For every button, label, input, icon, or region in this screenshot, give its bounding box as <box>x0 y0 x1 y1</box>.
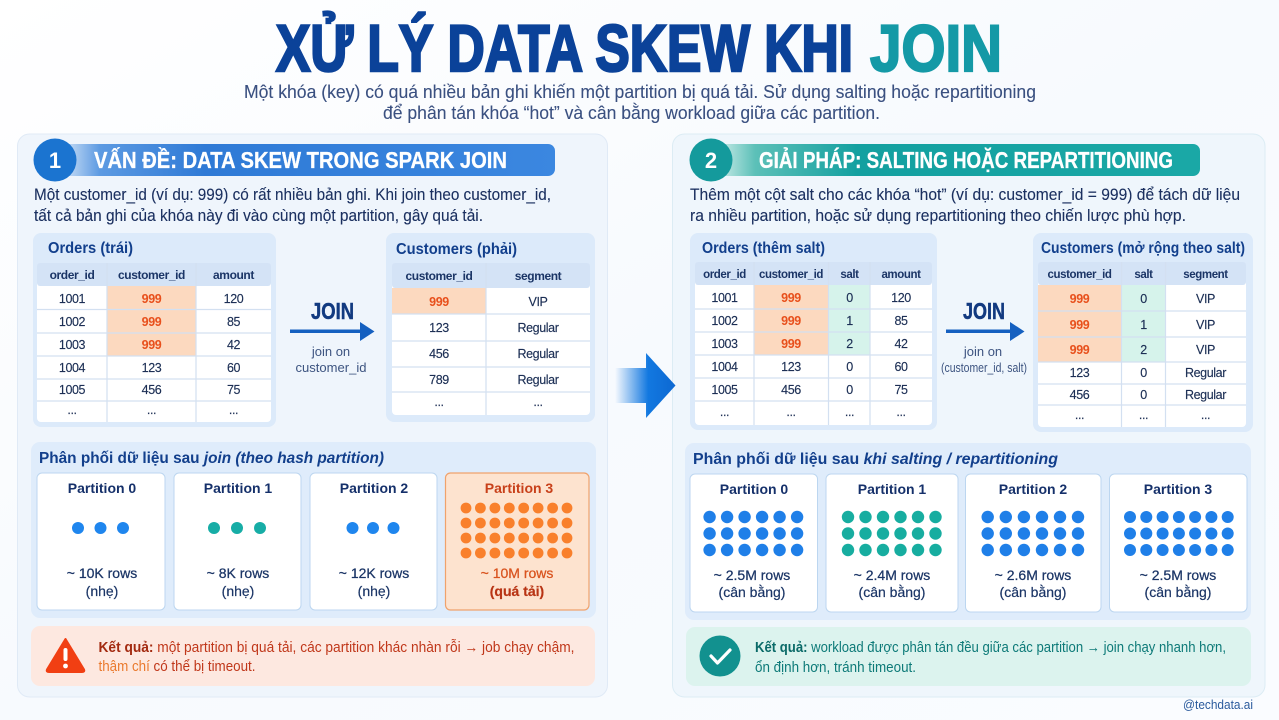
table: customers expanded by salt: VIP <box>1196 292 1215 306</box>
table: orders left: 1001 <box>59 292 86 306</box>
table: orders left: 42 <box>227 338 240 352</box>
table: customers left: Regular <box>518 321 559 335</box>
table: orders with salt: order_id <box>703 269 746 281</box>
arrow: problem to solution <box>615 353 676 418</box>
card: balanced partition 2: Partition 2 <box>999 481 1067 497</box>
table: orders left: ... <box>67 403 77 417</box>
table: customers expanded by salt: 123 <box>1070 366 1090 380</box>
arrow: join left <box>290 298 374 375</box>
table: customers expanded by salt: Regular <box>1185 388 1226 402</box>
table: customers expanded by salt: ... <box>1075 408 1084 422</box>
table: orders left: 85 <box>227 315 240 329</box>
arrow: join right <box>941 298 1027 375</box>
table: customers left: Regular <box>518 373 559 387</box>
table: orders with salt: 0 <box>846 360 853 374</box>
table: customers left: 789 <box>429 373 449 387</box>
table: orders with salt: 999 <box>781 314 801 328</box>
table: orders left <box>33 233 276 427</box>
card: partition 1 <box>174 473 301 610</box>
table: orders left: 999 <box>142 338 162 352</box>
card: balanced partition 2: (cân bằng) <box>1000 584 1066 600</box>
table: customers left: ... <box>434 395 444 409</box>
callout: problem result: Kết quả: một partition bị quá tải, các partition khác nhàn rỗi → job chạy chậm, <box>98 639 574 656</box>
table: customers expanded by salt: salt <box>1134 269 1153 281</box>
table: customers expanded by salt: ... <box>1201 408 1210 422</box>
table: orders with salt: ... <box>845 405 854 419</box>
table: orders with salt: ... <box>720 405 729 419</box>
table: customers expanded by salt: 999 <box>1070 343 1090 357</box>
table: orders with salt: 999 <box>781 337 801 351</box>
panel: distribution after join <box>31 442 596 618</box>
card: balanced partition 1: (cân bằng) <box>859 584 925 600</box>
text: solution description <box>690 186 1240 225</box>
subtitle <box>244 82 1036 123</box>
card: balanced partition 1 <box>826 474 958 612</box>
arrow: join left: JOIN <box>311 298 354 324</box>
callout: problem result <box>31 626 595 686</box>
icon: check circle <box>700 636 740 676</box>
card: partition 2: ~ 12K rows <box>339 565 409 581</box>
table: orders left: 75 <box>227 383 240 397</box>
card: partition 0: Partition 0 <box>68 480 136 496</box>
callout: solution result: ổn định hơn, tránh timeout. <box>755 659 916 676</box>
arrow: join right: (customer_id, salt) <box>941 360 1027 375</box>
table: orders left: 120 <box>224 292 244 306</box>
title: JOIN <box>870 11 1002 85</box>
table: orders left: amount <box>213 268 254 282</box>
panel: distribution after join: Phân phối dữ liệu sau join (theo hash partition) <box>39 450 384 467</box>
card: balanced partition 3 <box>1110 474 1247 612</box>
table: orders with salt: 0 <box>846 383 853 397</box>
table: orders left: 60 <box>227 361 240 375</box>
card: balanced partition 1: Partition 1 <box>858 481 926 497</box>
callout: solution result <box>686 627 1251 686</box>
subtitle: Một khóa (key) có quá nhiều bản ghi khiến một partition bị quá tải. Sử dụng salting hoặc repartitioning <box>244 82 1036 102</box>
table: customers expanded by salt: 456 <box>1070 388 1090 402</box>
heading: problem banner <box>34 138 555 182</box>
table: customers left <box>386 233 595 422</box>
table: orders left: 1004 <box>59 361 86 375</box>
table: orders with salt: 75 <box>894 383 908 397</box>
table: customers expanded by salt: VIP <box>1196 318 1215 332</box>
table: orders left: ... <box>147 403 156 417</box>
table: customers left: 456 <box>429 347 449 361</box>
table: customers expanded by salt: 0 <box>1140 366 1147 380</box>
text: problem description <box>34 186 551 225</box>
card: partition 3 overloaded: (quá tải) <box>490 583 544 599</box>
table: orders with salt: 1002 <box>711 314 738 328</box>
card: partition 3 overloaded: ~ 10M rows <box>481 565 553 581</box>
card: balanced partition 2: ~ 2.6M rows <box>995 567 1071 583</box>
card: partition 1: Partition 1 <box>204 480 272 496</box>
table: orders with salt <box>690 233 937 430</box>
table: customers expanded by salt: segment <box>1183 269 1228 281</box>
panel: distribution after salting: Phân phối dữ liệu sau khi salting / repartitioning <box>693 451 1058 468</box>
table: orders left: customer_id <box>118 268 185 282</box>
arrow: join left: join on <box>311 344 350 359</box>
table: customers expanded by salt: ... <box>1139 408 1148 422</box>
table: customers left: Regular <box>518 347 559 361</box>
table: orders left: 1002 <box>59 315 86 329</box>
table: orders with salt: 1005 <box>711 383 738 397</box>
table: orders left: 1003 <box>59 338 86 352</box>
table: orders with salt: 2 <box>846 337 853 351</box>
table: customers expanded by salt: 999 <box>1070 292 1090 306</box>
table: orders with salt: ... <box>786 405 796 419</box>
heading: solution banner: 2 <box>705 148 717 173</box>
table: customers left: ... <box>533 395 543 409</box>
panel: problem <box>18 134 608 697</box>
card: balanced partition 2 <box>966 474 1101 612</box>
card: partition 0: ~ 10K rows <box>67 565 137 581</box>
table: orders with salt: Orders (thêm salt) <box>702 240 825 257</box>
heading: solution banner: GIẢI PHÁP: SALTING HOẶC REPARTITIONING <box>759 145 1173 173</box>
table: customers left: customer_id <box>406 269 473 283</box>
card: balanced partition 0: Partition 0 <box>720 481 788 497</box>
table: customers expanded by salt: 0 <box>1140 388 1147 402</box>
table: orders left: 1005 <box>59 383 86 397</box>
table: orders with salt: 0 <box>846 291 853 305</box>
table: orders with salt: 60 <box>894 360 908 374</box>
callout: solution result: Kết quả: workload được phân tán đều giữa các partition → join chạy nhanh hơn, <box>755 639 1226 656</box>
icon: warning triangle <box>47 639 84 672</box>
card: partition 2 <box>310 473 437 610</box>
arrow: join left: customer_id <box>296 360 366 375</box>
table: orders with salt: salt <box>840 269 859 281</box>
arrow: join right: join on <box>963 344 1002 359</box>
table: customers expanded by salt: 0 <box>1140 292 1147 306</box>
table: orders with salt: 85 <box>894 314 908 328</box>
table: orders with salt: 1001 <box>711 291 738 305</box>
text: solution description: Thêm một cột salt cho các khóa “hot” (ví dụ: customer_id = 999) để tách dữ liệu <box>690 186 1240 204</box>
arrow: join right: JOIN <box>963 298 1005 324</box>
table: orders left: 123 <box>142 361 162 375</box>
table: customers expanded by salt: 2 <box>1140 343 1147 357</box>
table: orders left: order_id <box>50 268 94 282</box>
table: customers expanded by salt: Regular <box>1185 366 1226 380</box>
panel: solution <box>672 134 1265 697</box>
table: orders left: Orders (trái) <box>48 240 133 257</box>
card: balanced partition 3: Partition 3 <box>1144 481 1212 497</box>
card: balanced partition 0 <box>690 474 818 612</box>
table: orders with salt: 123 <box>781 360 801 374</box>
table: customers expanded by salt: 999 <box>1070 318 1090 332</box>
table: orders left: 456 <box>142 383 162 397</box>
callout: problem result: thậm chí có thể bị timeout. <box>98 658 256 675</box>
card: partition 2: Partition 2 <box>340 480 408 496</box>
table: orders left: 999 <box>142 315 162 329</box>
table: customers expanded by salt: Customers (mở rộng theo salt) <box>1041 240 1245 257</box>
card: balanced partition 3: (cân bằng) <box>1145 584 1211 600</box>
table: orders left: ... <box>229 403 238 417</box>
card: partition 3 overloaded <box>446 473 589 610</box>
card: balanced partition 1: ~ 2.4M rows <box>854 567 930 583</box>
table: orders with salt: 42 <box>894 337 908 351</box>
table: orders with salt: 456 <box>781 383 801 397</box>
text: problem description: tất cả bản ghi của khóa này đi vào cùng một partition, gây quá tải. <box>34 207 483 225</box>
table: customers left: 999 <box>429 295 449 309</box>
card: partition 1: ~ 8K rows <box>207 565 269 581</box>
text: solution description: ra nhiều partition, hoặc sử dụng repartitioning theo chiến lược phù hợp. <box>690 207 1186 225</box>
table: orders with salt: amount <box>881 269 921 281</box>
text: problem description: Một customer_id (ví dụ: 999) có rất nhiều bản ghi. Khi join theo customer_id, <box>34 186 551 204</box>
table: orders with salt: 1003 <box>711 337 738 351</box>
card: partition 1: (nhẹ) <box>222 583 254 599</box>
card: balanced partition 0: (cân bằng) <box>719 584 785 600</box>
heading: problem banner: 1 <box>49 148 61 173</box>
heading: problem banner: VẤN ĐỀ: DATA SKEW TRONG SPARK JOIN <box>94 146 507 173</box>
credit: @techdata.ai <box>1183 697 1253 712</box>
card: partition 0 <box>37 473 165 610</box>
card: partition 3 overloaded: Partition 3 <box>485 480 553 496</box>
card: partition 2: (nhẹ) <box>358 583 390 599</box>
table: customers expanded by salt: VIP <box>1196 343 1215 357</box>
card: balanced partition 0: ~ 2.5M rows <box>714 567 790 583</box>
table: customers left: Customers (phải) <box>396 241 517 258</box>
title: XỬ LÝ DATA SKEW KHI <box>276 11 853 85</box>
panel: distribution after salting <box>685 443 1251 620</box>
table: orders left: 999 <box>142 292 162 306</box>
table: customers expanded by salt: customer_id <box>1048 269 1112 281</box>
table: orders with salt: ... <box>896 405 906 419</box>
table: customers expanded by salt <box>1033 233 1253 432</box>
table: orders with salt: 120 <box>891 291 911 305</box>
table: customers left: 123 <box>429 321 449 335</box>
table: customers left: VIP <box>529 295 548 309</box>
table: customers expanded by salt: 1 <box>1140 318 1147 332</box>
table: orders with salt: customer_id <box>759 269 823 281</box>
table: orders with salt: 1004 <box>711 360 738 374</box>
card: balanced partition 3: ~ 2.5M rows <box>1140 567 1216 583</box>
heading: solution banner <box>690 138 1200 182</box>
subtitle: để phân tán khóa “hot” và cân bằng workload giữa các partition. <box>383 102 880 123</box>
table: orders with salt: 999 <box>781 291 801 305</box>
table: customers left: segment <box>515 269 562 283</box>
table: orders with salt: 1 <box>846 314 853 328</box>
card: partition 0: (nhẹ) <box>86 583 118 599</box>
